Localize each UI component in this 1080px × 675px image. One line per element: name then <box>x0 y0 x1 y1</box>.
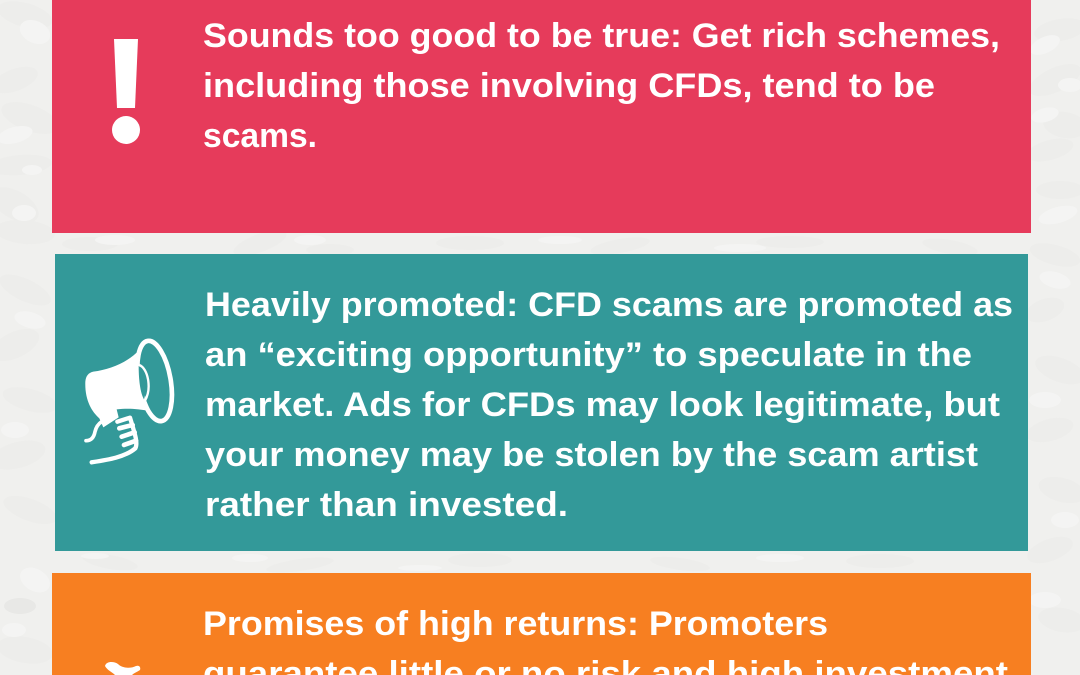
text: heavily promoted warning <box>205 286 1013 524</box>
text: heavily promoted warning: rather than invested. <box>205 486 568 524</box>
icon: bird <box>105 662 140 675</box>
text: sounds too good warning <box>203 17 1000 155</box>
icon: megaphone in hand <box>85 338 177 462</box>
text: high returns warning <box>203 605 1008 675</box>
text: heavily promoted warning: your money may be stolen by the scam artist <box>205 436 978 474</box>
text: heavily promoted warning: Heavily promoted: CFD scams are promoted as <box>205 286 1013 324</box>
text: sounds too good warning: including those involving CFDs, tend to be <box>203 67 935 105</box>
text: high returns warning: Promises of high returns: Promoters <box>203 605 828 643</box>
text: heavily promoted warning: market. Ads for CFDs may look legitimate, but <box>205 386 1000 424</box>
text: heavily promoted warning: an “exciting opportunity” to speculate in the <box>205 336 972 374</box>
text: sounds too good warning: scams. <box>203 117 317 155</box>
panel: promises of high returns <box>52 573 1031 675</box>
icon: exclamation mark <box>112 39 140 144</box>
text: sounds too good warning: Sounds too good to be true: Get rich schemes, <box>203 17 1000 55</box>
panel: sounds too good to be true <box>52 0 1031 233</box>
panel: heavily promoted <box>55 254 1028 551</box>
